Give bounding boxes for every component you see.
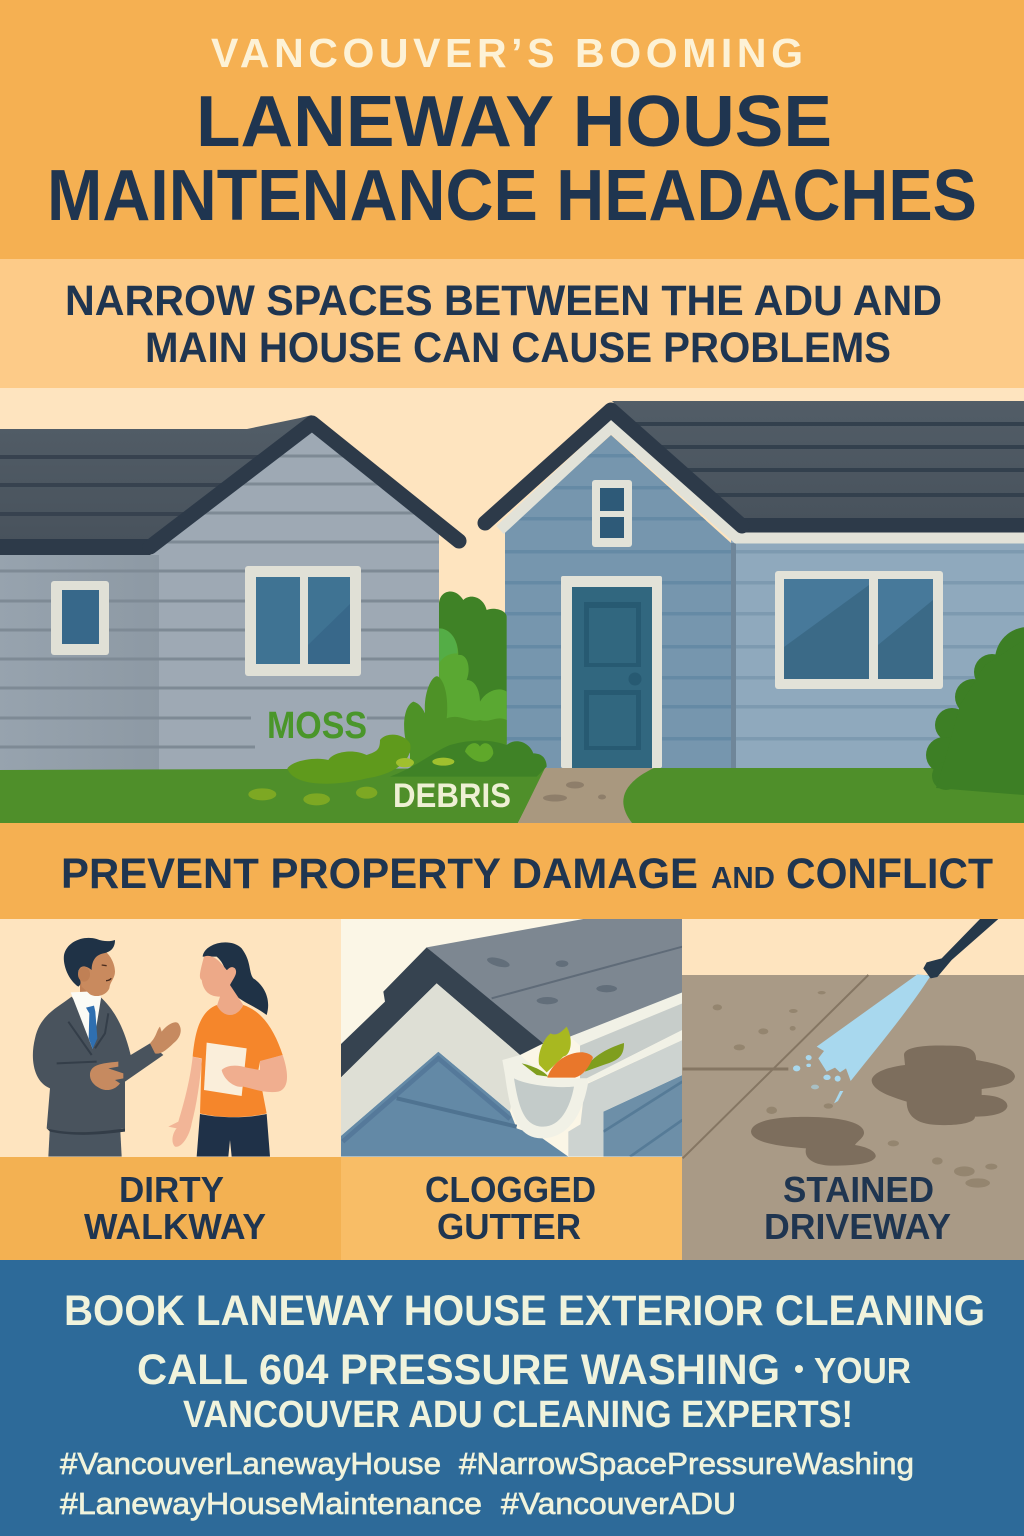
panel: clogged gutter <box>340 919 682 1260</box>
illustration: gutter with leaves <box>340 919 682 1157</box>
hashtag 2: #NarrowSpacePressureWashing <box>459 1446 914 1481</box>
cta phone line: CALL 604 PRESSURE WASHING <box>137 1346 780 1394</box>
band heading small word: AND <box>711 860 775 895</box>
hashtag 1: #VancouverLanewayHouse <box>60 1446 441 1481</box>
hashtag 3: #LanewayHouseMaintenance <box>60 1486 482 1521</box>
washer wand <box>923 919 998 978</box>
caption: stained: STAINED <box>783 1169 934 1210</box>
overgrown hedge and moss <box>248 592 547 805</box>
hashtags <box>60 1446 914 1521</box>
caption: gutter: GUTTER <box>437 1206 581 1247</box>
caption cell <box>341 1157 682 1260</box>
caption cell <box>0 1157 341 1260</box>
front door <box>561 576 662 768</box>
man <box>33 938 181 1157</box>
caption: clogged: CLOGGED <box>425 1169 596 1210</box>
panel: call to action footer <box>0 1260 1024 1536</box>
title line 1: LANEWAY HOUSE <box>196 82 832 162</box>
woman <box>168 942 287 1157</box>
oil stain small <box>751 1117 876 1166</box>
left laneway house <box>0 415 459 770</box>
cta experts line: VANCOUVER ADU CLEANING EXPERTS! <box>183 1394 853 1436</box>
label: debris: DEBRIS <box>393 777 511 815</box>
right main house <box>485 401 1024 768</box>
panel: subheading band <box>0 259 1024 388</box>
subheading line 2: MAIN HOUSE CAN CAUSE PROBLEMS <box>145 324 891 372</box>
band heading end: CONFLICT <box>786 850 993 898</box>
right shrub <box>926 627 1024 795</box>
gable window <box>592 480 632 547</box>
water spray <box>793 974 931 1103</box>
bullet separator <box>795 1365 803 1373</box>
panel: stained driveway <box>682 919 1024 1260</box>
small window <box>51 581 109 655</box>
hashtag 4: #VancouverADU <box>501 1486 736 1521</box>
label: moss: MOSS <box>267 705 367 747</box>
caption: dirty: DIRTY <box>119 1169 224 1210</box>
oil stain <box>872 1046 1015 1125</box>
cta heading: BOOK LANEWAY HOUSE EXTERIOR CLEANING <box>64 1287 985 1335</box>
cta your: YOUR <box>814 1350 911 1391</box>
panel: prevent damage band <box>0 823 1024 919</box>
band heading: PREVENT PROPERTY DAMAGE <box>61 850 698 898</box>
ground and walkway <box>0 768 1024 823</box>
caption: walkway: WALKWAY <box>84 1206 266 1247</box>
large window <box>245 566 361 676</box>
main window <box>775 571 943 689</box>
eyebrow heading: VANCOUVER’S BOOMING <box>211 30 803 76</box>
leaves and debris <box>522 1027 624 1078</box>
caption: driveway: DRIVEWAY <box>764 1206 951 1247</box>
illustration: pressure washer on driveway <box>683 919 1015 1188</box>
illustration: neighbours talking <box>33 938 287 1157</box>
panel: houses scene <box>0 388 1024 824</box>
panel: dirty walkway <box>0 919 341 1260</box>
panel: header <box>0 0 1024 259</box>
subheading line 1: NARROW SPACES BETWEEN THE ADU AND <box>65 277 942 325</box>
